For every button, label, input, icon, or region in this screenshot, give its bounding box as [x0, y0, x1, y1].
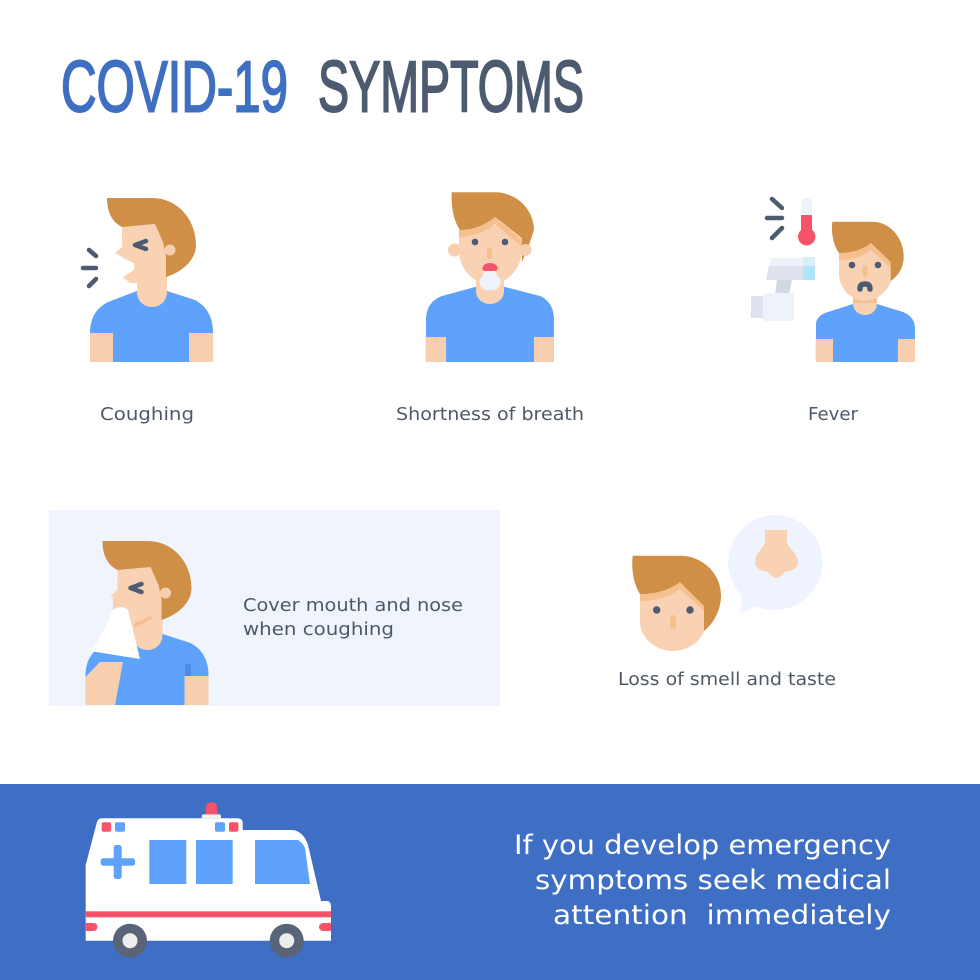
speech bubble with nose: [728, 515, 822, 613]
label: fever: Fever: [808, 404, 859, 425]
head: [632, 556, 721, 651]
text: cover mouth and nose: [243, 595, 463, 640]
icon: loss of smell and taste: [632, 515, 822, 651]
icon: man covering cough with tissue: [86, 541, 208, 705]
panel: emergency banner: [0, 784, 980, 980]
title: [61, 48, 584, 128]
text: emergency advice: attention immediately: [553, 900, 891, 931]
title: SYMPTOMS: [318, 48, 584, 128]
icon: man coughing in profile: [83, 198, 213, 362]
text: cover mouth and nose: when coughing: [243, 619, 394, 640]
text: emergency advice: symptoms seek medical: [535, 865, 891, 896]
label: loss of smell and taste: Loss of smell and taste: [618, 669, 836, 690]
text: cover mouth and nose: Cover mouth and nose: [243, 595, 463, 616]
text: emergency advice: If you develop emergency: [514, 830, 891, 861]
text: emergency advice: [514, 830, 891, 931]
label: coughing: Coughing: [100, 404, 194, 425]
title: COVID-19: [61, 48, 288, 128]
icon: ambulance: [86, 802, 331, 958]
icon: man short of breath: [426, 192, 554, 362]
label: shortness of breath: Shortness of breath: [396, 404, 584, 425]
panel: cover mouth and nose: [49, 510, 500, 706]
icon: man with fever and thermometer gun: [751, 198, 915, 362]
